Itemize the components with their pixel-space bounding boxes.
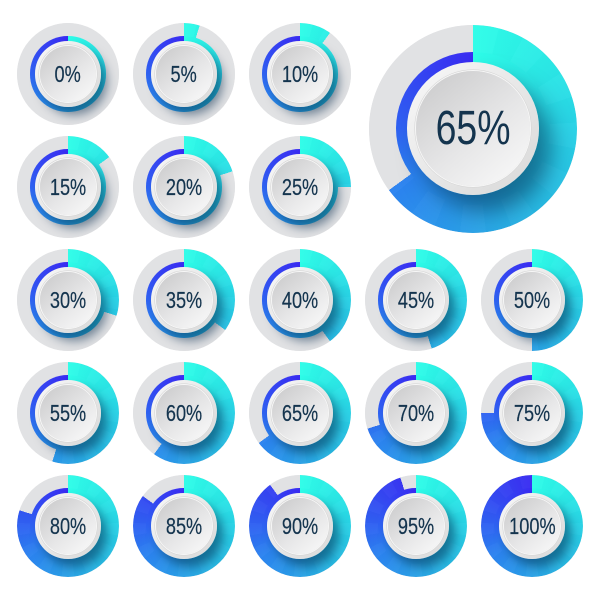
ring xyxy=(262,375,338,451)
wedge xyxy=(133,362,235,464)
button: 15% xyxy=(50,174,86,200)
gauge 95% xyxy=(365,475,467,577)
button xyxy=(267,41,333,107)
button xyxy=(383,380,449,446)
gauge 25% xyxy=(249,136,351,238)
button: 50% xyxy=(514,286,550,312)
button: 70% xyxy=(398,400,434,426)
button xyxy=(35,493,101,559)
gauge 80% xyxy=(17,475,119,577)
ring xyxy=(146,149,222,225)
button xyxy=(151,41,217,107)
button xyxy=(35,380,101,446)
wedge xyxy=(17,475,119,577)
button xyxy=(35,154,101,220)
button: 20% xyxy=(166,174,202,200)
button xyxy=(499,493,565,559)
wedge xyxy=(365,362,467,464)
gauge 90% xyxy=(249,475,351,577)
button xyxy=(151,380,217,446)
button xyxy=(383,267,449,333)
button: 55% xyxy=(50,400,86,426)
ring xyxy=(262,488,338,564)
ring xyxy=(30,36,106,112)
button: 80% xyxy=(50,512,86,538)
gauge 60% xyxy=(133,362,235,464)
gauge 70% xyxy=(365,362,467,464)
button: 0% xyxy=(55,60,81,86)
wedge xyxy=(369,24,577,232)
ring xyxy=(396,52,550,205)
wedge xyxy=(133,475,235,577)
wedge xyxy=(133,249,235,351)
ring xyxy=(378,262,454,338)
wedge xyxy=(17,249,119,351)
ring xyxy=(378,488,454,564)
button: 90% xyxy=(282,512,318,538)
button: 65% xyxy=(436,102,510,154)
button: 35% xyxy=(166,286,202,312)
button: 5% xyxy=(171,60,197,86)
gauge 55% xyxy=(17,362,119,464)
button xyxy=(499,267,565,333)
gauge 15% xyxy=(17,136,119,238)
button xyxy=(267,267,333,333)
large gauge 65% xyxy=(369,24,577,232)
button: 10% xyxy=(282,60,318,86)
wedge xyxy=(481,362,583,464)
wedge xyxy=(249,23,351,125)
ring xyxy=(262,149,338,225)
button xyxy=(35,41,101,107)
button xyxy=(151,267,217,333)
button xyxy=(267,380,333,446)
button: 60% xyxy=(166,400,202,426)
wedge xyxy=(249,475,351,577)
button: 45% xyxy=(398,286,434,312)
wedge xyxy=(249,362,351,464)
gauge 100% xyxy=(481,475,583,577)
button: 100% xyxy=(509,512,555,538)
ring xyxy=(494,488,570,564)
ring xyxy=(146,36,222,112)
gauge 20% xyxy=(133,136,235,238)
button: 65% xyxy=(282,400,318,426)
wedge xyxy=(249,249,351,351)
wedge xyxy=(17,136,119,238)
button xyxy=(151,493,217,559)
button: 85% xyxy=(166,512,202,538)
gauge 35% xyxy=(133,249,235,351)
ring xyxy=(30,488,106,564)
gauge 30% xyxy=(17,249,119,351)
wedge xyxy=(481,475,583,577)
button xyxy=(151,154,217,220)
wedge xyxy=(133,23,235,125)
button: 25% xyxy=(282,174,318,200)
ring xyxy=(494,262,570,338)
button: 75% xyxy=(514,400,550,426)
ring xyxy=(262,262,338,338)
ring xyxy=(30,262,106,338)
ring xyxy=(262,36,338,112)
ring xyxy=(146,375,222,451)
wedge xyxy=(481,249,583,351)
gauge 5% xyxy=(133,23,235,125)
wedge xyxy=(17,23,119,125)
gauge 65% xyxy=(249,362,351,464)
wedge xyxy=(133,136,235,238)
gauge 85% xyxy=(133,475,235,577)
wedge xyxy=(365,249,467,351)
wedge xyxy=(17,362,119,464)
button: 30% xyxy=(50,286,86,312)
gauge 50% xyxy=(481,249,583,351)
button: 95% xyxy=(398,512,434,538)
gauge 10% xyxy=(249,23,351,125)
button xyxy=(267,154,333,220)
ring xyxy=(30,375,106,451)
ring xyxy=(30,149,106,225)
gauge 40% xyxy=(249,249,351,351)
wedge xyxy=(365,475,467,577)
button xyxy=(499,380,565,446)
button xyxy=(383,493,449,559)
button: 40% xyxy=(282,286,318,312)
gauge 0% xyxy=(17,23,119,125)
button xyxy=(407,62,539,195)
gauge 75% xyxy=(481,362,583,464)
wedge xyxy=(249,136,351,238)
ring xyxy=(146,262,222,338)
ring xyxy=(146,488,222,564)
ring xyxy=(378,375,454,451)
button xyxy=(267,493,333,559)
ring xyxy=(494,375,570,451)
gauge 45% xyxy=(365,249,467,351)
button xyxy=(35,267,101,333)
